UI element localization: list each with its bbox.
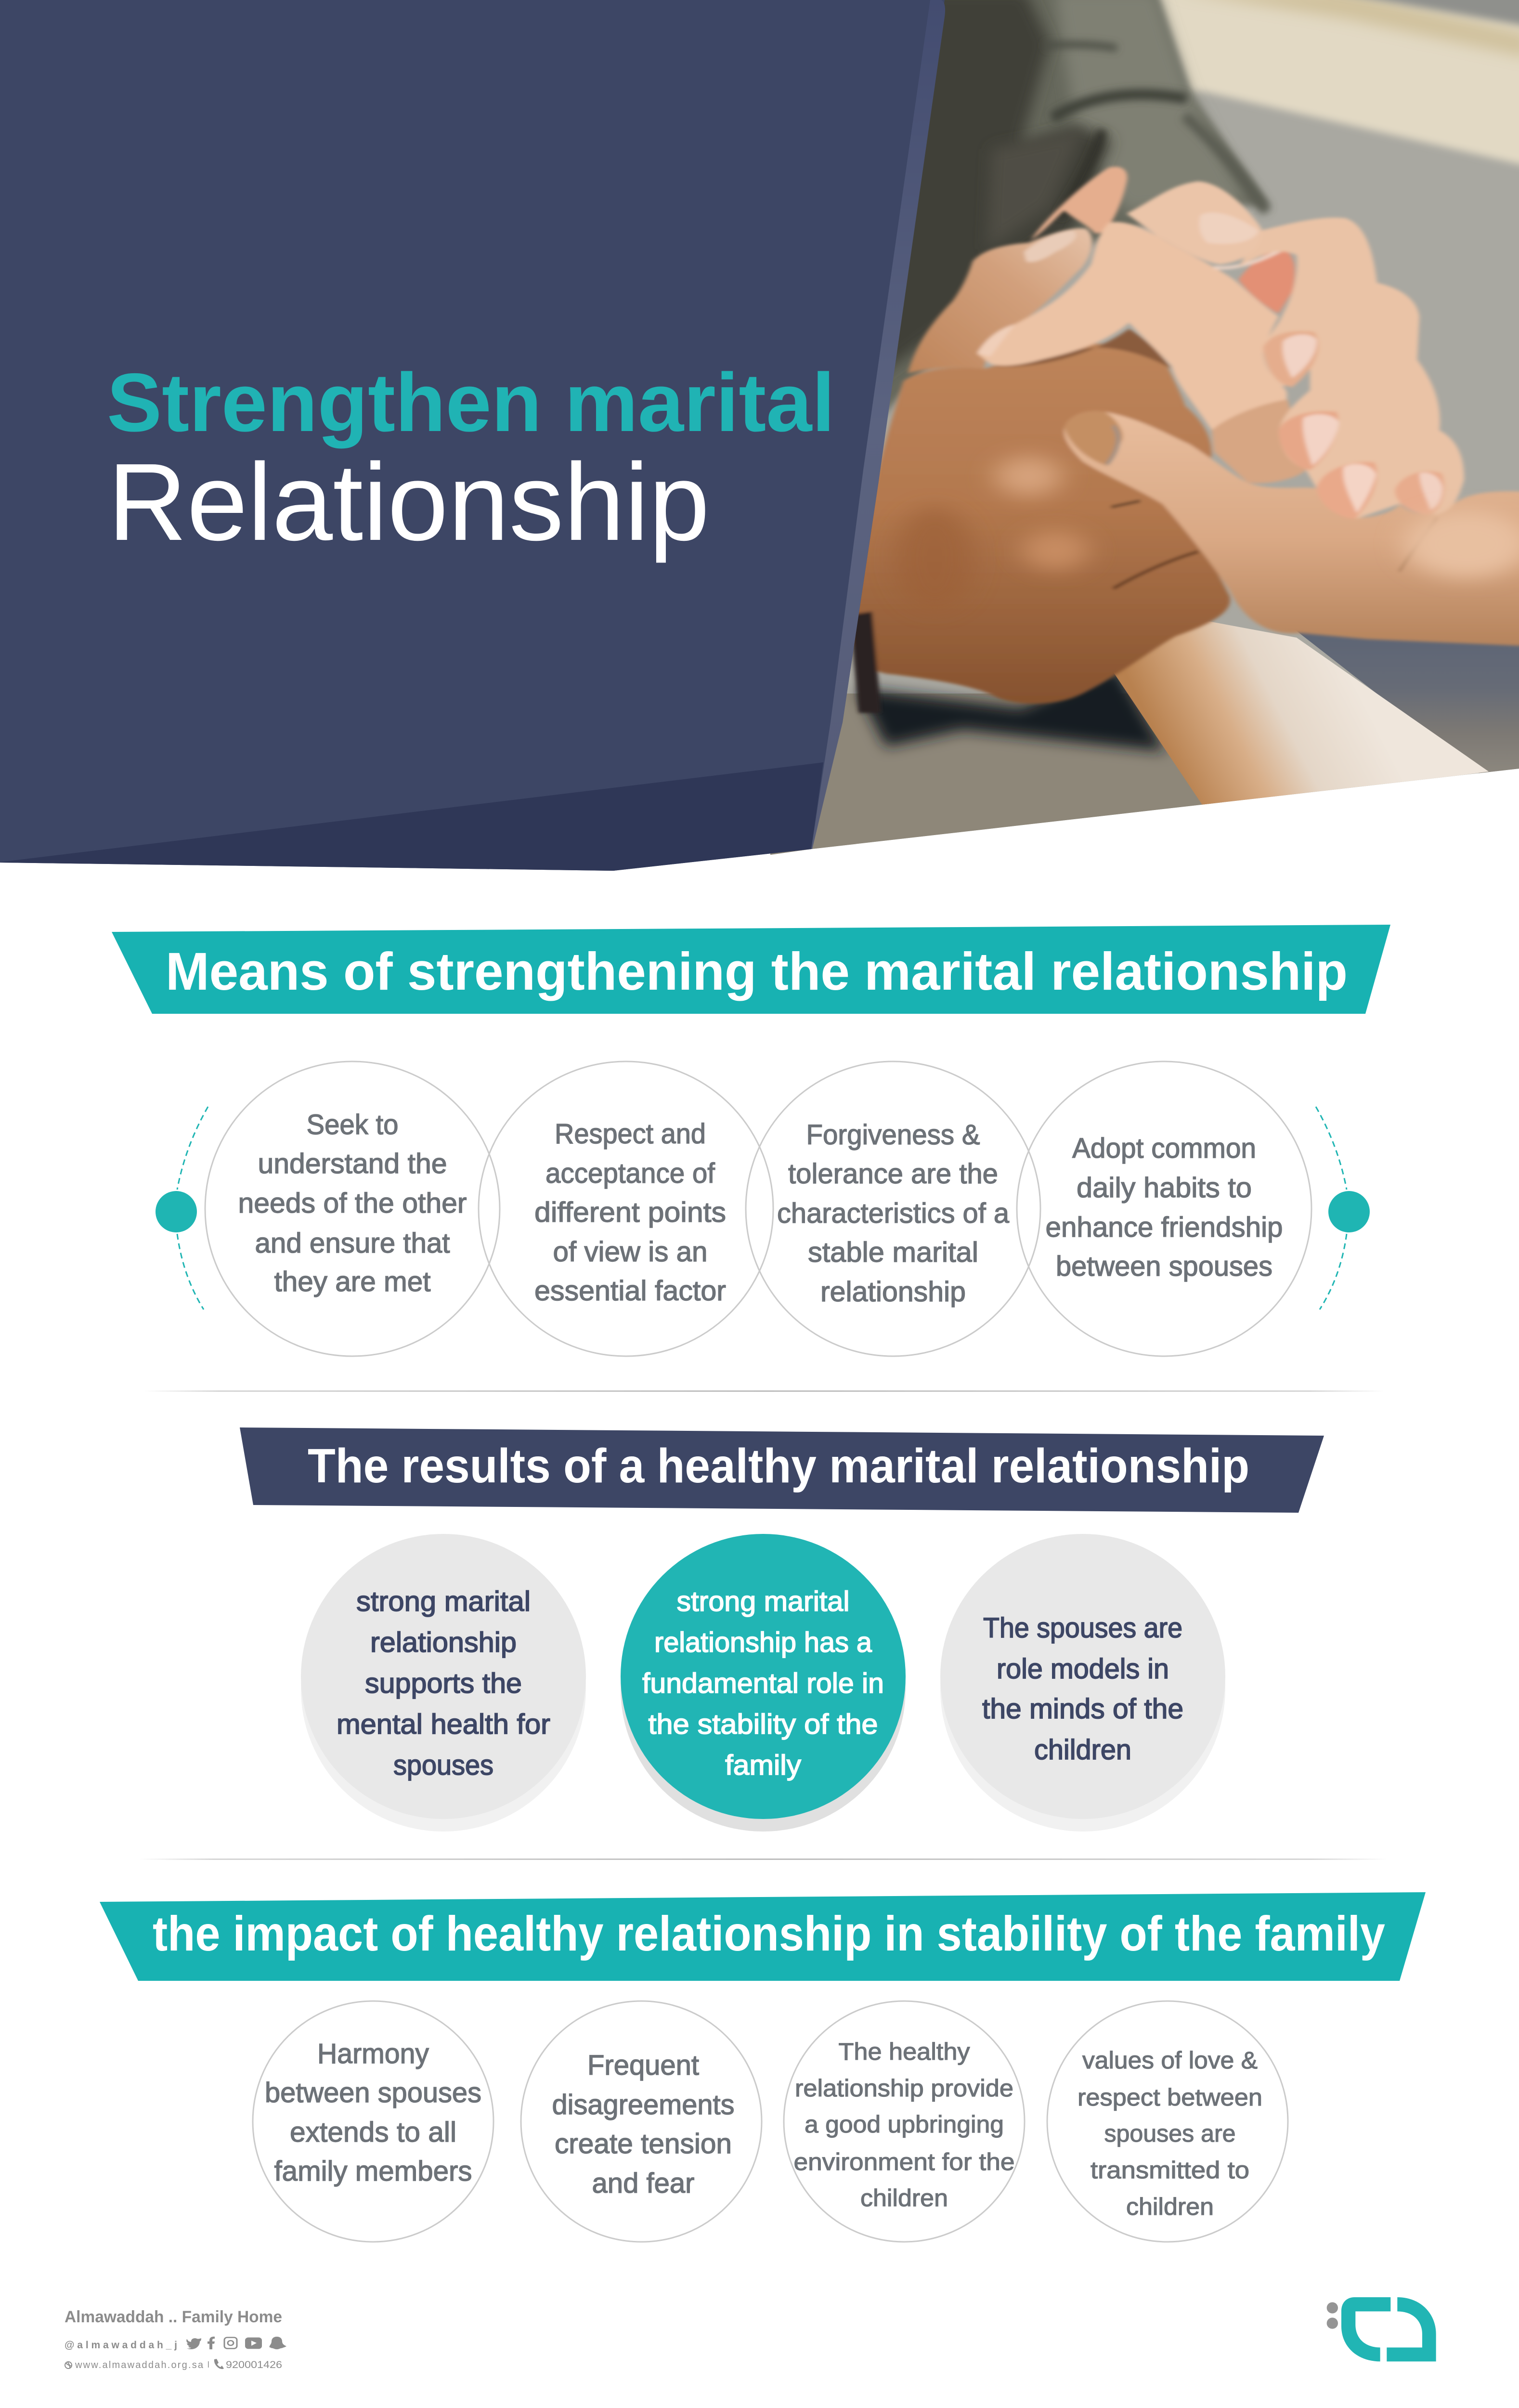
circle: seek to understand: they are met xyxy=(274,1266,430,1297)
circle: seek to understand: understand the xyxy=(258,1148,447,1179)
heading banner: results xyxy=(240,1427,1324,1513)
footer name: Almawaddah .. Family Home xyxy=(65,2308,282,2326)
circle: frequent disagreements: and fear xyxy=(592,2168,694,2199)
circle: role models: role models in xyxy=(997,1653,1169,1685)
navy title panel xyxy=(0,0,945,871)
circle: respect and acceptance: acceptance of xyxy=(545,1158,715,1189)
circle: harmony: Harmony xyxy=(317,2038,429,2069)
title xyxy=(107,356,835,563)
heading banner: means xyxy=(112,925,1390,1014)
circle: frequent disagreements: create tension xyxy=(555,2128,732,2159)
circle: seek to understand: and ensure that xyxy=(255,1228,450,1259)
circle: seek to understand: needs of the other xyxy=(238,1188,467,1219)
circle: values of love: respect between xyxy=(1078,2084,1262,2111)
section 3: impact xyxy=(100,1892,1426,2242)
icon: instagram xyxy=(224,2338,237,2348)
circle: forgiveness and tolerance: characteristics of a xyxy=(777,1198,1010,1229)
heading banner: means: Means of strengthening the marital relationship xyxy=(166,942,1348,1001)
circle: values of love: values of love & xyxy=(1082,2047,1258,2074)
circle: harmony: between spouses xyxy=(265,2077,481,2108)
circle: forgiveness and tolerance: tolerance are the xyxy=(788,1158,998,1190)
icon: youtube xyxy=(245,2338,262,2349)
circle: common daily habits: between spouses xyxy=(1056,1251,1272,1282)
circle: seek to understand: Seek to xyxy=(306,1109,399,1140)
circle: family stability (highlighted): family xyxy=(725,1750,801,1781)
circle: family stability (highlighted): relationship has a xyxy=(654,1627,872,1658)
footer separator xyxy=(208,2361,209,2368)
circle: seek to understand xyxy=(205,1061,500,1356)
circle: harmony xyxy=(253,2001,493,2242)
footer website: www.almawaddah.org.sa xyxy=(75,2360,204,2370)
circle: frequent disagreements: Frequent xyxy=(587,2050,699,2081)
circle: good upbringing: relationship provide xyxy=(795,2075,1013,2102)
title: Strengthen marital xyxy=(107,356,835,449)
circle: good upbringing: environment for the xyxy=(793,2148,1015,2175)
circle: values of love: spouses are xyxy=(1104,2120,1235,2147)
footer phone number: 920001426 xyxy=(226,2359,282,2370)
heading banner: results: The results of a healthy marital relationship xyxy=(308,1439,1249,1493)
photo: clasped hands xyxy=(770,0,1519,867)
circle: forgiveness and tolerance: stable marital xyxy=(808,1237,978,1268)
circle: respect and acceptance: Respect and xyxy=(555,1118,706,1150)
circle: values of love: transmitted to xyxy=(1091,2157,1249,2184)
circle: forgiveness and tolerance: relationship xyxy=(820,1276,966,1308)
circle: good upbringing xyxy=(784,2001,1025,2242)
icon: phone xyxy=(214,2359,224,2369)
circle: values of love xyxy=(1047,2001,1288,2242)
circle: respect and acceptance: different points xyxy=(534,1197,726,1228)
circle: forgiveness and tolerance xyxy=(746,1061,1040,1356)
circle: good upbringing: a good upbringing xyxy=(805,2111,1004,2138)
circle: harmony: extends to all xyxy=(290,2117,456,2148)
circle: mental health: strong marital xyxy=(356,1586,531,1617)
right timeline ornament xyxy=(1316,1107,1370,1309)
circle: frequent disagreements: disagreements xyxy=(552,2089,735,2120)
logo xyxy=(1327,2297,1436,2361)
circle: family stability (highlighted) xyxy=(621,1534,906,1832)
section 1: means of strengthening xyxy=(112,925,1390,1356)
circle: mental health: supports the xyxy=(365,1668,522,1699)
circle: family stability (highlighted): strong marital xyxy=(677,1586,849,1617)
icon: globe xyxy=(65,2362,72,2369)
circle: family stability (highlighted): the stability of the xyxy=(648,1709,878,1740)
circle: role models: children xyxy=(1034,1734,1131,1766)
circle: respect and acceptance: essential factor xyxy=(534,1275,726,1307)
circle: frequent disagreements xyxy=(521,2001,762,2242)
circle: mental health: spouses xyxy=(393,1750,493,1781)
circle: good upbringing: children xyxy=(860,2185,948,2212)
icon: snapchat xyxy=(269,2337,286,2349)
circle: mental health: relationship xyxy=(370,1627,517,1658)
circle: common daily habits xyxy=(1017,1061,1311,1356)
circle: mental health xyxy=(301,1534,586,1832)
circle: role models: the minds of the xyxy=(982,1693,1183,1725)
circle: family stability (highlighted): fundamental role in xyxy=(642,1668,884,1699)
title: Relationship xyxy=(108,441,710,563)
circle: harmony: family members xyxy=(274,2156,472,2187)
circle: common daily habits: Adopt common xyxy=(1072,1133,1256,1164)
circle: role models: The spouses are xyxy=(983,1612,1182,1644)
icon: facebook xyxy=(208,2337,215,2349)
hero banner xyxy=(0,0,1519,871)
circle: forgiveness and tolerance: Forgiveness & xyxy=(806,1119,980,1151)
circle: values of love: children xyxy=(1126,2193,1214,2220)
circle: role models xyxy=(940,1534,1225,1832)
heading banner: impact: the impact of healthy relationship in stability of the family xyxy=(153,1906,1385,1961)
circle: mental health: mental health for xyxy=(337,1709,550,1740)
footer contact block xyxy=(65,2308,286,2370)
circle: respect and acceptance xyxy=(479,1061,773,1356)
circle: common daily habits: enhance friendship xyxy=(1046,1212,1283,1243)
circle: respect and acceptance: of view is an xyxy=(553,1236,708,1268)
circle: common daily habits: daily habits to xyxy=(1077,1172,1252,1204)
footer handle: @almawaddah_j xyxy=(65,2340,177,2351)
left timeline ornament xyxy=(156,1107,208,1309)
heading banner: impact xyxy=(100,1892,1426,1981)
section 2: results xyxy=(240,1427,1324,1832)
icon: twitter xyxy=(186,2338,201,2349)
circle: good upbringing: The healthy xyxy=(839,2038,970,2065)
